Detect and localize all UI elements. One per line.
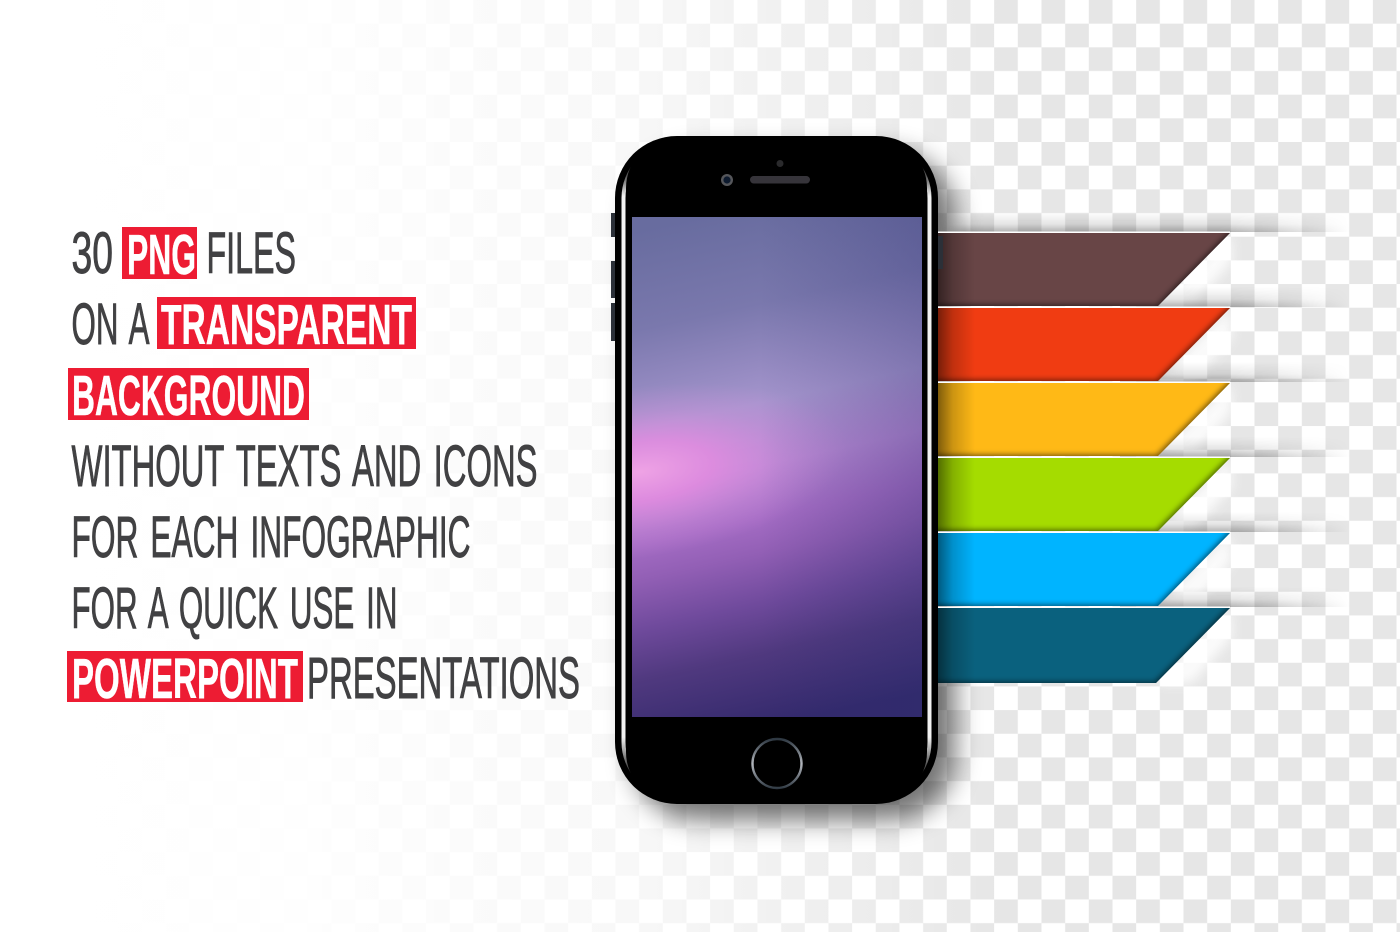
colored bars	[930, 231, 1234, 685]
line: powerpoint presentations: POWERPOINT	[72, 647, 298, 710]
home button	[752, 739, 802, 788]
headline text block	[67, 221, 580, 711]
line: 30 PNG files	[72, 221, 296, 286]
line: on a transparent: TRANSPARENT	[161, 293, 412, 356]
screen	[632, 217, 922, 717]
rim highlight	[624, 144, 930, 796]
bar 3: amber	[930, 381, 1234, 458]
bar 5: sky blue	[930, 531, 1234, 608]
line: without texts and icons: WITHOUT TEXTS AND ICONS	[72, 434, 538, 499]
bar 4: lime	[930, 456, 1234, 533]
bar 1: brown	[930, 231, 1234, 308]
front camera	[721, 174, 733, 186]
bar cast shadows	[938, 212, 1350, 683]
line: 30 PNG files: PNG	[127, 223, 196, 286]
phone	[611, 136, 943, 804]
line: background	[68, 364, 309, 427]
line: background: BACKGROUND	[72, 364, 305, 427]
sensor dot	[776, 160, 784, 167]
phone body	[615, 136, 938, 804]
line: 30 PNG files: FILES	[206, 221, 296, 286]
line: for a quick use in: FOR A QUICK USE IN	[72, 576, 398, 641]
bar 2: orange-red	[930, 306, 1234, 383]
side buttons	[611, 213, 943, 341]
front panel	[626, 138, 927, 802]
line: on a transparent: ON A	[72, 292, 150, 357]
phone drop shadow	[632, 152, 955, 820]
line: 30 PNG files: 30	[72, 221, 113, 286]
line: on a transparent	[72, 292, 416, 357]
bar 6: teal	[930, 606, 1234, 685]
line: powerpoint presentations: PRESENTATIONS	[307, 646, 580, 711]
speaker	[750, 176, 810, 184]
line: for each infographic: FOR EACH INFOGRAPHIC	[72, 505, 470, 570]
white separator lines above bars	[938, 232, 1230, 608]
